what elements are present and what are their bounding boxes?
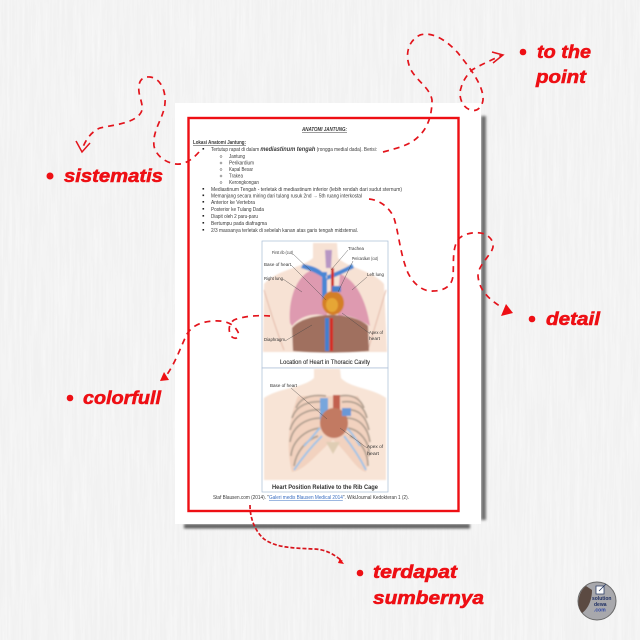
anatomy labels: Base of heart — [264, 262, 292, 267]
bullet list: Bertumpu pada diafragma — [211, 221, 267, 227]
badge text: solution — [592, 596, 611, 602]
rib cage labels: heart — [367, 451, 380, 456]
arrow: detail — [369, 199, 513, 316]
figure frame — [262, 368, 388, 492]
page sheet — [175, 103, 481, 524]
sub-list: Kapal Besar — [229, 167, 253, 173]
label: to the point — [520, 42, 591, 87]
panel: document page — [175, 103, 486, 528]
rib cage leader lines — [291, 388, 367, 448]
arrow: colorfull — [160, 316, 270, 381]
bullet: mediastinum: Tertutup rapat di dalam mediastinum tengah (rongga medial dada). Berisi: — [211, 147, 377, 153]
bullet markers — [202, 148, 204, 231]
figure: heart position relative to rib cage — [262, 368, 388, 492]
label text line two: sumbernya — [373, 588, 484, 608]
bullet list: Memanjang secara miring dari tulang rusuk 2nd → 5th ruang interkostal — [211, 194, 362, 200]
sub-list: Jantung — [229, 154, 245, 160]
label: terdapat sumbernya — [357, 562, 484, 608]
anatomy illustration — [263, 243, 387, 352]
anatomy labels: Diaphragm — [264, 337, 285, 342]
arrow: to the point — [383, 34, 503, 152]
bullet — [520, 49, 526, 55]
anatomy labels: Pericardium (cut) — [352, 256, 378, 261]
sub-list: Trakea — [229, 174, 243, 180]
anatomy labels: Trachea — [348, 246, 365, 251]
label text: to the — [537, 42, 591, 62]
anatomy labels: heart — [369, 336, 381, 341]
source citation: Staf Blausen.com (2014). "Galeri medis Blausen Medical 2014". WikiJournal Kedokteran 1 (2). — [213, 495, 409, 501]
label text: sistematis — [64, 166, 163, 186]
rib cage labels: Base of heart — [270, 383, 298, 388]
red frame — [188, 118, 458, 511]
label text line two: point — [535, 67, 587, 87]
anatomy labels: Apex of — [369, 330, 384, 335]
bullet — [529, 316, 535, 322]
anatomy labels — [264, 246, 385, 342]
logo badge — [578, 582, 616, 620]
bullet list: Posterior ke Tulang Dada — [211, 207, 264, 213]
bullet — [67, 395, 73, 401]
page shadow — [184, 116, 486, 528]
bullet list: Diapit oleh 2 paru-paru — [211, 214, 258, 220]
document title: ANATOMI JANTUNG: — [301, 127, 347, 133]
bullet list: Anterior ke Vertebra — [211, 200, 255, 206]
badge pen icon — [596, 584, 606, 594]
badge text: dewa — [594, 602, 607, 608]
sub-list: Kerongkongan — [229, 180, 259, 186]
anatomy labels: Left lung — [367, 272, 385, 277]
document text — [193, 127, 402, 234]
figure frame — [262, 241, 388, 368]
anatomy leader lines — [283, 250, 369, 341]
section heading: Lokasi Anatomi Jantung: — [193, 140, 246, 146]
anatomy labels: Right lung — [264, 276, 284, 281]
label: detail — [529, 309, 601, 329]
bullet — [357, 570, 363, 576]
label: sistematis — [46, 166, 163, 186]
bullet list: 2/3 massanya terletak di sebelah kanan atas garis tengah midsternal. — [211, 228, 358, 234]
badge disc — [578, 582, 616, 620]
bullet — [46, 172, 54, 180]
arrow: terdapat sumbernya — [250, 505, 344, 564]
label text: detail — [546, 309, 601, 329]
label text: colorfull — [83, 388, 162, 408]
rib cage labels — [270, 383, 384, 456]
sub-list: Perikardium — [229, 160, 254, 166]
sub-bullet markers — [220, 156, 222, 184]
figure caption: Location of Heart in Thoracic Cavity — [280, 359, 371, 366]
sub-list — [229, 154, 259, 186]
rib cage illustration — [264, 369, 386, 480]
bullet list — [211, 187, 402, 234]
label: colorfull — [67, 388, 162, 408]
bullet list: Mediastinum Tengah - terletak di mediastinum inferior (lebih rendah dari sudut sternum) — [211, 187, 402, 193]
badge dark photo segment — [579, 586, 592, 613]
label text: terdapat — [373, 562, 458, 582]
badge text — [592, 596, 611, 614]
arrow: sistematis — [76, 77, 199, 164]
figure caption: Heart Position Relative to the Rib Cage — [272, 484, 379, 491]
anatomy labels: First rib (cut) — [272, 250, 293, 255]
figure: location of heart in thoracic cavity — [262, 241, 388, 368]
badge text: .com — [594, 608, 606, 614]
rib cage labels: Apex of — [367, 444, 384, 449]
